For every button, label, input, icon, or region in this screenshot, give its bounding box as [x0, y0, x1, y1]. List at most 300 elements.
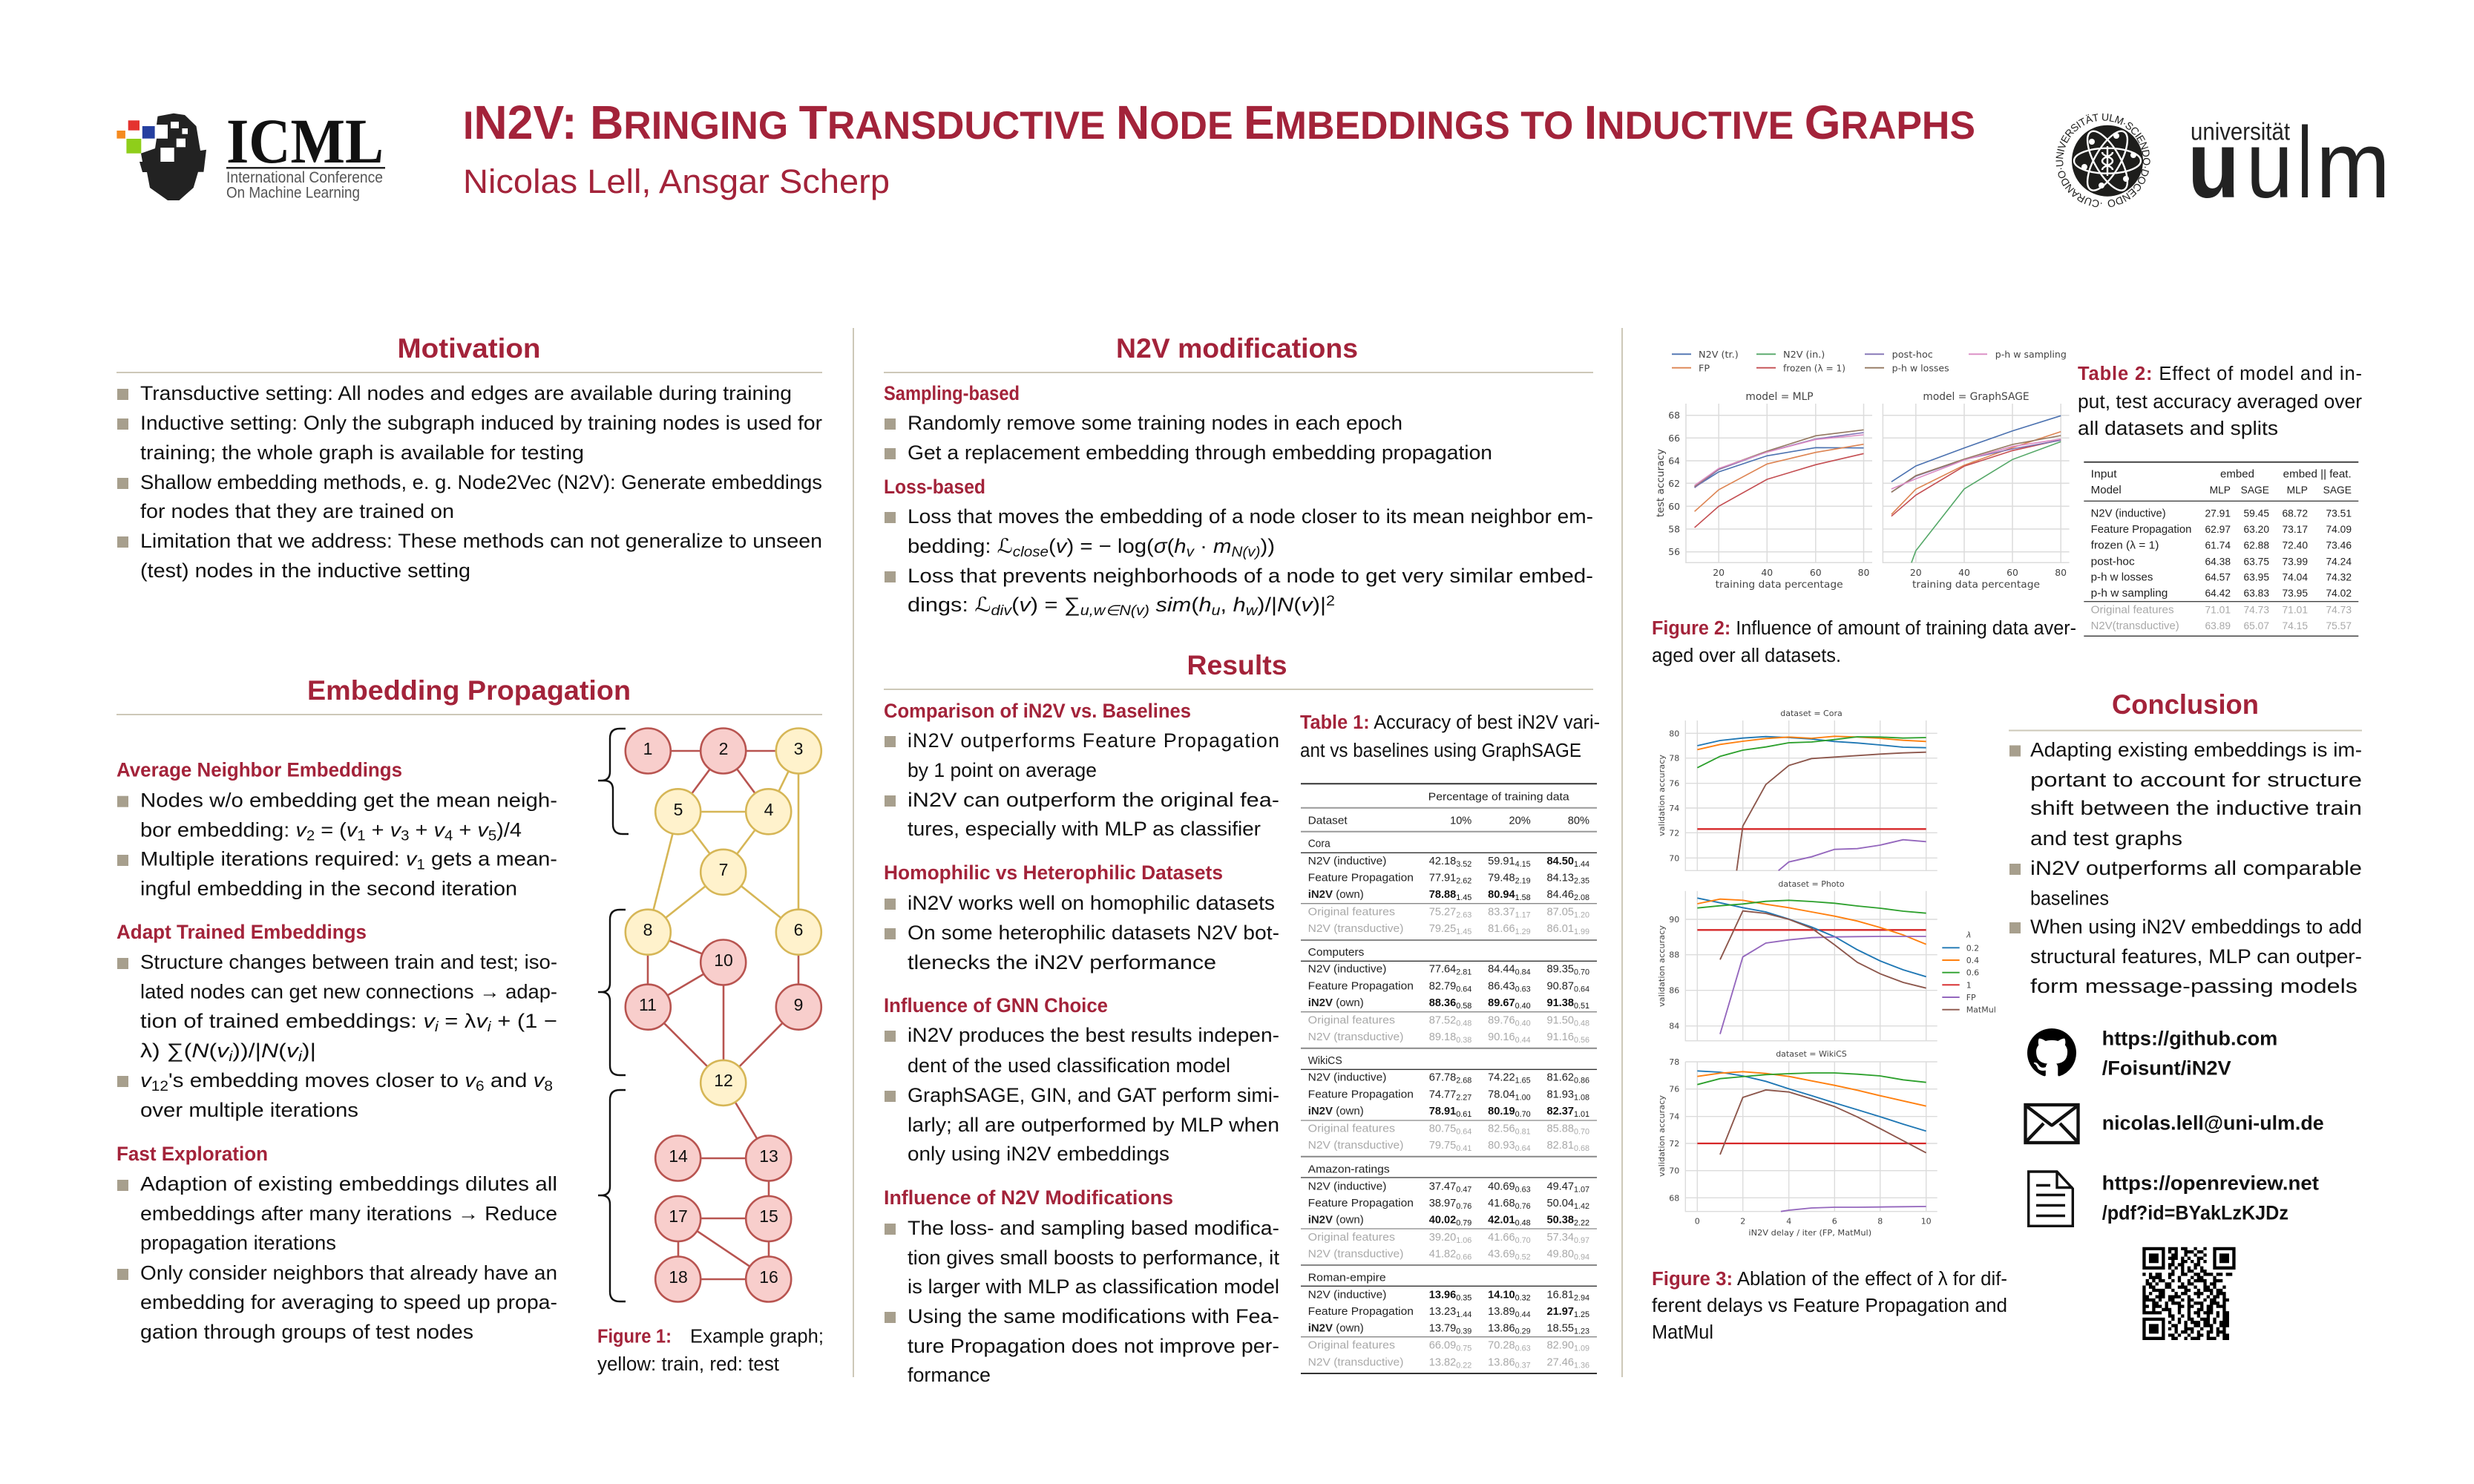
- rows: Cora: [1308, 838, 1589, 936]
- table header: 10%: [1450, 815, 1471, 827]
- rows: Computers: 0.38: [1456, 1036, 1471, 1045]
- caption: figure 3: MatMul: [1652, 1322, 1713, 1343]
- text block: loss-based: bedding: ℒ: [908, 535, 1011, 558]
- logo: ICML: ICML: [226, 105, 384, 177]
- rows: Roman-empire: 13.86: [1488, 1356, 1515, 1368]
- rows: Cora: 59.91: [1488, 856, 1515, 867]
- text block: loss-based: u,w∈N(v): [1080, 603, 1149, 619]
- table rows: 59.45: [2243, 508, 2269, 519]
- caption: table 1: [1300, 712, 1600, 761]
- table rows: 74.73: [2326, 605, 2352, 616]
- text block: adapt trained embeddings: λ) ∑( N(v: [140, 1040, 227, 1062]
- table 2: effect of model and input: [2084, 462, 2358, 636]
- rows: Roman-empire: 82.90: [1546, 1340, 1574, 1352]
- bullet list: motivation: (test) nodes in the inductive setting: [140, 559, 470, 582]
- table header: SAGE: [2323, 485, 2352, 496]
- text block: N2V modifications influence: [884, 1186, 1280, 1386]
- panel titles and axis labels: 80: [2055, 567, 2067, 578]
- rows: Amazon-ratings: 0.70: [1515, 1236, 1531, 1245]
- node numbers: 8: [643, 920, 652, 939]
- text block: GNN choice: GraphSAGE, GIN, and GAT perform simi-: [908, 1084, 1279, 1106]
- node numbers: 11: [639, 995, 657, 1014]
- table rows: N2V (inductive): [2091, 508, 2166, 520]
- rows: Computers: 0.40: [1515, 1002, 1531, 1011]
- text block: average neighbor embeddings: 2: [306, 828, 315, 844]
- rows: Amazon-ratings: 0.94: [1574, 1252, 1589, 1261]
- table rows: 62.88: [2243, 539, 2269, 551]
- rows: Roman-empire: 0.32: [1515, 1293, 1531, 1302]
- rows: Roman-empire: 1.25: [1574, 1310, 1589, 1319]
- table header: [2091, 469, 2352, 496]
- table rows: 74.04: [2282, 572, 2308, 583]
- rows: Cora: 4.15: [1515, 860, 1531, 869]
- legend: lambda: 0.2: [1966, 943, 1979, 953]
- text block: homophilic vs heterophilic: [884, 861, 1279, 974]
- text block: average neighbor embeddings: 3: [401, 828, 409, 844]
- rows: Computers: 0.64: [1456, 985, 1471, 994]
- rows: Roman-empire: Feature Propagation: [1308, 1305, 1414, 1318]
- table rules: [2084, 462, 2358, 636]
- table rows: 65.07: [2243, 620, 2269, 631]
- node numbers: [639, 739, 803, 1287]
- text block: comparison: [884, 700, 1279, 840]
- rows: Computers: Feature Propagation: [1308, 979, 1414, 992]
- rows: Computers: 84.44: [1488, 964, 1515, 976]
- text block: loss-based: 2: [1326, 594, 1335, 609]
- rows: Cora: 1.99: [1574, 928, 1589, 936]
- text block: loss-based: N(v): [1231, 545, 1260, 560]
- rows: WikiCS: 82.81: [1546, 1140, 1574, 1152]
- caption: table 2: all datasets and splits: [2078, 418, 2278, 439]
- panel titles and axis labels: 66: [1668, 433, 1680, 444]
- text block: average neighbor embeddings: Nodes w/o embedding get the mean neigh-: [140, 789, 557, 812]
- rows: Computers: N2V (transductive): [1308, 1031, 1403, 1043]
- caption: table 1: Table 1: Accuracy of best iN2V vari-: [1300, 712, 1600, 733]
- text block: GNN choice: larly; all are outperformed by MLP when: [908, 1114, 1279, 1136]
- text block: adapt trained embeddings: and: [485, 1069, 534, 1091]
- panel titles and axis labels: training data percentage: [1716, 580, 1843, 591]
- table rows: N2V(transductive): [2091, 620, 2179, 632]
- text block: homophilic vs heterophilic: tlenecks the iN2V performance: [908, 951, 1216, 974]
- contact: paper: https://openreview.net: [2102, 1172, 2319, 1194]
- table rows: 63.75: [2243, 556, 2269, 567]
- node numbers: 18: [669, 1267, 688, 1287]
- bullet list: motivation: training; the whole graph is available for testing: [140, 441, 584, 464]
- panel: embedding propagation: [117, 675, 824, 1375]
- rows: Cora: 79.25: [1429, 923, 1456, 935]
- rows: Amazon-ratings: 39.20: [1429, 1232, 1456, 1244]
- table rows: 74.32: [2326, 572, 2352, 583]
- rows: WikiCS: 1.65: [1515, 1077, 1531, 1086]
- rows: Roman-empire: iN2V (own): [1308, 1322, 1364, 1335]
- text block: adapt trained embeddings: ))/|: [232, 1040, 261, 1062]
- table rows: post-hoc: [2091, 556, 2135, 568]
- rows: Roman-empire: 0.35: [1456, 1293, 1471, 1302]
- rows: Computers: 0.40: [1515, 1019, 1531, 1028]
- rows: Cora: 81.66: [1488, 923, 1515, 935]
- node numbers: 10: [714, 951, 733, 970]
- text block: loss-based: v) = − log( σ(h: [1056, 535, 1185, 557]
- contact: github: /Foisunt/iN2V: [2102, 1057, 2231, 1079]
- chart titles and axis labels: 76: [1669, 779, 1679, 789]
- rows: Roman-empire: 14.10: [1488, 1289, 1515, 1301]
- table rows: 75.57: [2326, 620, 2352, 631]
- rows: Amazon-ratings: Feature Propagation: [1308, 1197, 1414, 1209]
- caption: table 2: Table 2: Effect of model and in-: [2078, 364, 2362, 384]
- lines: Photo: [1697, 898, 1926, 1034]
- chart titles and axis labels: 10: [1921, 1216, 1932, 1226]
- heading: results: Results: [1187, 650, 1287, 680]
- text block: average neighbor embeddings: Multiple iterations required: v: [140, 848, 416, 870]
- text block: fast exploration: embeddings after many iterations → Reduce: [140, 1202, 557, 1224]
- rows: Cora: 1.44: [1574, 860, 1589, 869]
- text block: loss-based: dings: ℒ: [908, 594, 989, 617]
- text block: average neighbor embeddings: Average Neighbor Embeddings: [117, 759, 402, 781]
- bullet list: motivation: Inductive setting: Only the subgraph induced by training nodes is used for: [140, 412, 822, 434]
- bullet list: motivation: Shallow embedding methods, e. g. Node2Vec (N2V): Generate embeddings: [140, 471, 822, 493]
- rows: Roman-empire: 0.22: [1456, 1361, 1471, 1370]
- table rows: p-h w losses: [2091, 572, 2153, 584]
- rows: Roman-empire: 1.09: [1574, 1345, 1589, 1353]
- rows: WikiCS: 67.78: [1429, 1072, 1456, 1084]
- rows: WikiCS: 81.62: [1546, 1072, 1574, 1084]
- table rows: 27.91: [2205, 508, 2231, 519]
- rows: Roman-empire: 13.86: [1488, 1323, 1515, 1335]
- text block: sampling-based: Randomly remove some training nodes in each epoch: [908, 412, 1402, 434]
- rows: Cora: 2.35: [1574, 876, 1589, 885]
- logo: University of Ulm: m: [2316, 112, 2390, 217]
- rows: Amazon-ratings: 49.80: [1546, 1248, 1574, 1260]
- table rows: Feature Propagation: [2091, 524, 2191, 536]
- rows: Cora: Feature Propagation: [1308, 871, 1414, 884]
- text block: loss-based: (: [1011, 594, 1019, 616]
- text block: adapt trained embeddings: = λ: [439, 1010, 476, 1032]
- rows: Amazon-ratings: 41.82: [1429, 1248, 1456, 1260]
- rows: Computers: 86.43: [1488, 980, 1515, 992]
- rows: Cora: N2V (transductive): [1308, 922, 1403, 935]
- rows: Cora: 2.19: [1515, 876, 1531, 885]
- chart titles and axis labels: 6: [1832, 1216, 1837, 1226]
- node numbers: 1: [643, 739, 652, 758]
- rows: WikiCS: 0.68: [1574, 1144, 1589, 1153]
- rows: Roman-empire: 2.94: [1574, 1293, 1589, 1302]
- bullet list: motivation: Limitation that we address: These methods can not generalize to unseen: [140, 530, 822, 552]
- node numbers: 2: [719, 739, 728, 758]
- node numbers: 4: [764, 800, 774, 819]
- node numbers: 6: [794, 920, 803, 939]
- rows: Amazon-ratings: 0.47: [1456, 1185, 1471, 1194]
- chart titles and axis labels: 0: [1695, 1216, 1700, 1226]
- legend: lambda: λ: [1966, 930, 1972, 939]
- text block: adapt trained embeddings: i: [298, 1049, 303, 1065]
- text block: GNN choice: [884, 994, 1279, 1165]
- node numbers: 17: [669, 1206, 688, 1226]
- text block: GNN choice: Influence of GNN Choice: [884, 994, 1108, 1017]
- chart titles and axis labels: 76: [1669, 1085, 1679, 1094]
- rows: WikiCS: 85.88: [1546, 1123, 1574, 1135]
- caption: table 2: [2078, 364, 2363, 439]
- chart titles and axis labels: validation accuracy: [1657, 1095, 1667, 1177]
- text block: N2V modifications influence: Influence of N2V Modifications: [884, 1186, 1173, 1209]
- text block: adapt trained embeddings: [117, 921, 557, 1121]
- table rows: Original features: [2091, 605, 2174, 617]
- rows: Cora: 83.37: [1488, 906, 1515, 918]
- rows: WikiCS: 0.70: [1574, 1127, 1589, 1136]
- chart titles and axis labels: 80: [1669, 729, 1679, 738]
- logo: ICML: [117, 105, 385, 202]
- text block: average neighbor embeddings: v: [434, 818, 446, 841]
- bullet list: motivation: Transductive setting: All nodes and edges are available during training: [140, 382, 792, 404]
- table rows: 63.83: [2243, 588, 2269, 599]
- rows: Cora: 84.50: [1546, 856, 1574, 867]
- rows: Amazon-ratings: 0.97: [1574, 1236, 1589, 1245]
- rows: Cora: N2V (inductive): [1308, 855, 1386, 867]
- rows: Roman-empire: 66.09: [1429, 1340, 1456, 1352]
- legend: lambda: 1: [1966, 980, 1972, 990]
- bullet list: conclusion: portant to account for structure: [2030, 769, 2362, 791]
- rows: Cora: 87.05: [1546, 906, 1574, 918]
- text block: homophilic vs heterophilic: On some heterophilic datasets N2V bot-: [908, 922, 1279, 944]
- rows: Computers: 89.76: [1488, 1014, 1515, 1026]
- text block: adapt trained embeddings: )|: [302, 1040, 316, 1062]
- rows: Cora: 1.29: [1515, 928, 1531, 936]
- table rows: 64.42: [2205, 588, 2231, 599]
- rows: WikiCS: 2.27: [1456, 1093, 1471, 1102]
- table rows: 71.01: [2205, 605, 2231, 616]
- table rules: [1301, 784, 1597, 1373]
- chart titles and axis labels: 78: [1669, 1057, 1679, 1067]
- legend: p-h w losses: [1892, 364, 1949, 374]
- table 1: accuracy: [1301, 784, 1597, 1373]
- text block: N2V modifications influence: The loss- and sampling based modifica-: [908, 1217, 1279, 1239]
- contact: github: https://github.com: [2102, 1027, 2277, 1049]
- rows: Computers: 0.63: [1515, 985, 1531, 994]
- panel titles and axis labels: 60: [1668, 501, 1680, 512]
- icon: envelope: [2026, 1105, 2078, 1143]
- caption: figure 3: Figure 3: Ablation of the effect of λ for dif-: [1652, 1269, 2007, 1290]
- node numbers: 15: [759, 1206, 778, 1226]
- rows: Roman-empire: 13.96: [1429, 1289, 1456, 1301]
- panel titles and axis labels: model = GraphSAGE: [1923, 391, 2030, 403]
- caption: figure 3: [1652, 1269, 2007, 1343]
- figure 3: validation accuracy line charts: [1657, 709, 1996, 1238]
- lines: model MLP: [1695, 430, 1864, 528]
- chart titles and axis labels: 86: [1669, 986, 1679, 996]
- heading: conclusion: Conclusion: [2112, 689, 2259, 720]
- chart titles and axis labels: 68: [1669, 1193, 1679, 1203]
- text block: average neighbor embeddings: +: [366, 818, 390, 841]
- chart titles and axis labels: dataset = Photo: [1778, 879, 1845, 889]
- rows: Amazon-ratings: iN2V (own): [1308, 1213, 1364, 1226]
- rows: Amazon-ratings: 0.76: [1456, 1202, 1471, 1211]
- text block: GNN choice: dent of the used classification model: [908, 1054, 1230, 1077]
- rows: WikiCS: 1.00: [1515, 1093, 1531, 1102]
- panel: results: [884, 650, 1600, 1386]
- text block: sampling-based: [884, 382, 1492, 464]
- table rows: p-h w sampling: [2091, 588, 2168, 600]
- rows: Roman-empire: 13.89: [1488, 1306, 1515, 1318]
- rows: Amazon-ratings: 1.06: [1456, 1236, 1471, 1245]
- rows: WikiCS: Feature Propagation: [1308, 1088, 1414, 1100]
- rows: WikiCS: iN2V (own): [1308, 1105, 1364, 1117]
- chart titles and axis labels: iN2V delay / iter (FP, MatMul): [1748, 1228, 1871, 1238]
- caption: figure 1: [597, 1327, 824, 1375]
- rows: Roman-empire: 1.23: [1574, 1327, 1589, 1336]
- text block: fast exploration: Adaption of existing embeddings dilutes all: [140, 1172, 557, 1195]
- node numbers: 9: [794, 995, 803, 1014]
- bullet list: conclusion: Adapting existing embeddings is im-: [2030, 739, 2362, 761]
- rows: Roman-empire: 0.37: [1515, 1361, 1531, 1370]
- text block: N2V modifications influence: formance: [908, 1364, 991, 1386]
- table rows: 64.57: [2205, 572, 2231, 583]
- caption: figure 2: aged over all datasets.: [1652, 646, 1841, 666]
- table rows: 63.89: [2205, 620, 2231, 631]
- text block: average neighbor embeddings: +: [453, 818, 477, 841]
- chart titles and axis labels: 74: [1669, 804, 1679, 813]
- caption: figure 1: yellow: train, red: test: [597, 1354, 779, 1375]
- table rows: 72.40: [2282, 539, 2308, 551]
- panel titles and axis labels: 20: [1910, 567, 1922, 578]
- logo: University of Ulm: l: [2297, 106, 2312, 219]
- text block: loss-based: ·: [1194, 535, 1213, 557]
- authors: Nicolas Lell, Ansgar Scherp: [463, 162, 890, 200]
- table rows: 74.24: [2326, 556, 2352, 567]
- text block: loss-based: sim: [1149, 594, 1191, 616]
- rows: Roman-empire: 16.81: [1546, 1289, 1574, 1301]
- text block: adapt trained embeddings: N(v: [261, 1040, 296, 1062]
- text block: average neighbor embeddings: 1: [416, 858, 425, 873]
- text block: adapt trained embeddings: v: [476, 1010, 489, 1032]
- rows: WikiCS: 81.93: [1546, 1089, 1574, 1100]
- logo: University of Ulm: u: [2188, 112, 2240, 217]
- caption: table 1: ant vs baselines using GraphSAGE: [1300, 741, 1581, 761]
- text block: homophilic vs heterophilic: Homophilic vs Heterophilic Datasets: [884, 861, 1223, 884]
- contact: email: [2026, 1105, 2324, 1143]
- rows: WikiCS: 0.64: [1515, 1144, 1531, 1153]
- rows: Amazon-ratings: 40.02: [1429, 1214, 1456, 1226]
- rows: WikiCS: 1.08: [1574, 1093, 1589, 1102]
- rows: Computers: 0.84: [1515, 968, 1531, 977]
- rows: Roman-empire: N2V (transductive): [1308, 1356, 1403, 1368]
- text block: adapt trained embeddings: i: [488, 1020, 492, 1035]
- rows: Amazon-ratings: Amazon-ratings: [1308, 1163, 1390, 1176]
- panel: N2V modifications: [884, 333, 1593, 619]
- chart titles and axis labels: 72: [1669, 828, 1679, 838]
- text block: average neighbor embeddings: ingful embedding in the second iteration: [140, 878, 517, 900]
- table rows: 73.17: [2282, 524, 2308, 535]
- rows: Cora: 1.45: [1456, 928, 1471, 936]
- legend: post-hoc: [1892, 349, 1933, 361]
- table rows: 73.46: [2326, 539, 2352, 551]
- rows: Amazon-ratings: 0.66: [1456, 1252, 1471, 1261]
- rows: Computers: N2V (inductive): [1308, 963, 1386, 976]
- node numbers: 3: [794, 739, 803, 758]
- rows: Computers: 0.58: [1456, 1002, 1471, 1011]
- table rows: 74.73: [2243, 605, 2269, 616]
- edges: test: [648, 751, 798, 1279]
- rows: Roman-empire: 18.55: [1546, 1323, 1574, 1335]
- rows: Amazon-ratings: 0.63: [1515, 1185, 1531, 1194]
- rows: Computers: Original features: [1308, 1014, 1395, 1026]
- rows: Amazon-ratings: Original features: [1308, 1231, 1395, 1244]
- text block: adapt trained embeddings: v: [465, 1069, 477, 1091]
- rows: Amazon-ratings: 0.79: [1456, 1218, 1471, 1227]
- table rows: 73.51: [2326, 508, 2352, 519]
- text block: average neighbor embeddings: 4: [444, 828, 453, 844]
- text block: adapt trained embeddings: Structure changes between train and test; iso-: [140, 951, 557, 974]
- rows: WikiCS: 80.93: [1488, 1140, 1515, 1152]
- table header: Dataset: [1308, 814, 1348, 827]
- chart titles and axis labels: 4: [1786, 1216, 1791, 1226]
- bullet list: conclusion: and test graphs: [2030, 827, 2182, 850]
- icon: github: [2027, 1028, 2076, 1076]
- text block: loss-based: w: [1246, 603, 1259, 619]
- text block: adapt trained embeddings: 6: [476, 1079, 485, 1094]
- legend: frozen (λ = 1): [1783, 364, 1845, 374]
- contact: paper: [2029, 1172, 2319, 1226]
- contact: email: nicolas.lell@uni-ulm.de: [2102, 1112, 2324, 1134]
- rows: Computers: [1308, 946, 1589, 1045]
- text block: average neighbor embeddings: [117, 759, 557, 900]
- panel titles and axis labels: 40: [1761, 567, 1773, 578]
- bullet list: conclusion: When using iN2V embeddings to add: [2030, 916, 2362, 938]
- text block: comparison: tures, especially with MLP as classifier: [908, 818, 1261, 840]
- rows: WikiCS: 74.77: [1429, 1089, 1456, 1100]
- text block: average neighbor embeddings: gets a mean-: [425, 848, 557, 870]
- text block: loss-based: )/|: [1257, 594, 1277, 616]
- logo: University of Ulm: [2055, 106, 2390, 219]
- caption: figure 1: Example graph;: [690, 1327, 824, 1347]
- caption: table 2: put, test accuracy averaged over: [2078, 392, 2363, 413]
- rows: Cora: 78.88: [1429, 889, 1456, 901]
- icon: document: [2029, 1172, 2073, 1226]
- rows: Amazon-ratings: 0.52: [1515, 1252, 1531, 1261]
- rows: Amazon-ratings: 1.42: [1574, 1202, 1589, 1211]
- text block: loss-based: (: [1049, 535, 1056, 557]
- text block: fast exploration: embedding for averaging to speed up propa-: [140, 1291, 557, 1313]
- rows: Computers: 91.16: [1546, 1031, 1574, 1043]
- rows: Roman-empire: Roman-empire: [1308, 1272, 1386, 1284]
- rows: Computers: 89.18: [1429, 1031, 1456, 1043]
- chart grid and axes: [1686, 404, 2070, 562]
- rows: WikiCS: 0.61: [1456, 1110, 1471, 1119]
- panel titles and axis labels: 80: [1858, 567, 1869, 578]
- text block: average neighbor embeddings: bor embedding: v: [140, 818, 306, 841]
- rows: Computers: 87.52: [1429, 1014, 1456, 1026]
- lines: WikiCS: [1697, 1071, 1926, 1212]
- table header: MLP: [2210, 485, 2231, 496]
- chart titles and axis labels: 78: [1669, 754, 1679, 764]
- text block: comparison: iN2V outperforms Feature Propagation: [908, 729, 1279, 752]
- text block: fast exploration: [117, 1143, 557, 1343]
- rows: Amazon-ratings: 1.07: [1574, 1185, 1589, 1194]
- rows: Cora: 1.45: [1456, 893, 1471, 902]
- panel titles and axis labels: 60: [2007, 567, 2018, 578]
- text block: GNN choice: iN2V produces the best results indepen-: [908, 1024, 1279, 1046]
- panel titles and axis labels: 20: [1713, 567, 1725, 578]
- table rows: 73.95: [2282, 588, 2308, 599]
- text block: adapt trained embeddings: lated nodes can get new connections → adap-: [140, 980, 557, 1002]
- rows: WikiCS: 1.01: [1574, 1110, 1589, 1119]
- rows: Cora: 84.13: [1546, 872, 1574, 884]
- rows: Cora: 42.18: [1429, 856, 1456, 867]
- rows: WikiCS: 79.75: [1429, 1140, 1456, 1152]
- panel titles and axis labels: training data percentage: [1912, 580, 2040, 591]
- text block: adapt trained embeddings: 8: [544, 1079, 553, 1094]
- rows: Roman-empire: N2V (inductive): [1308, 1288, 1386, 1301]
- figure 2: line charts of test accuracy: [1656, 349, 2070, 591]
- rows: Computers: 82.79: [1429, 980, 1456, 992]
